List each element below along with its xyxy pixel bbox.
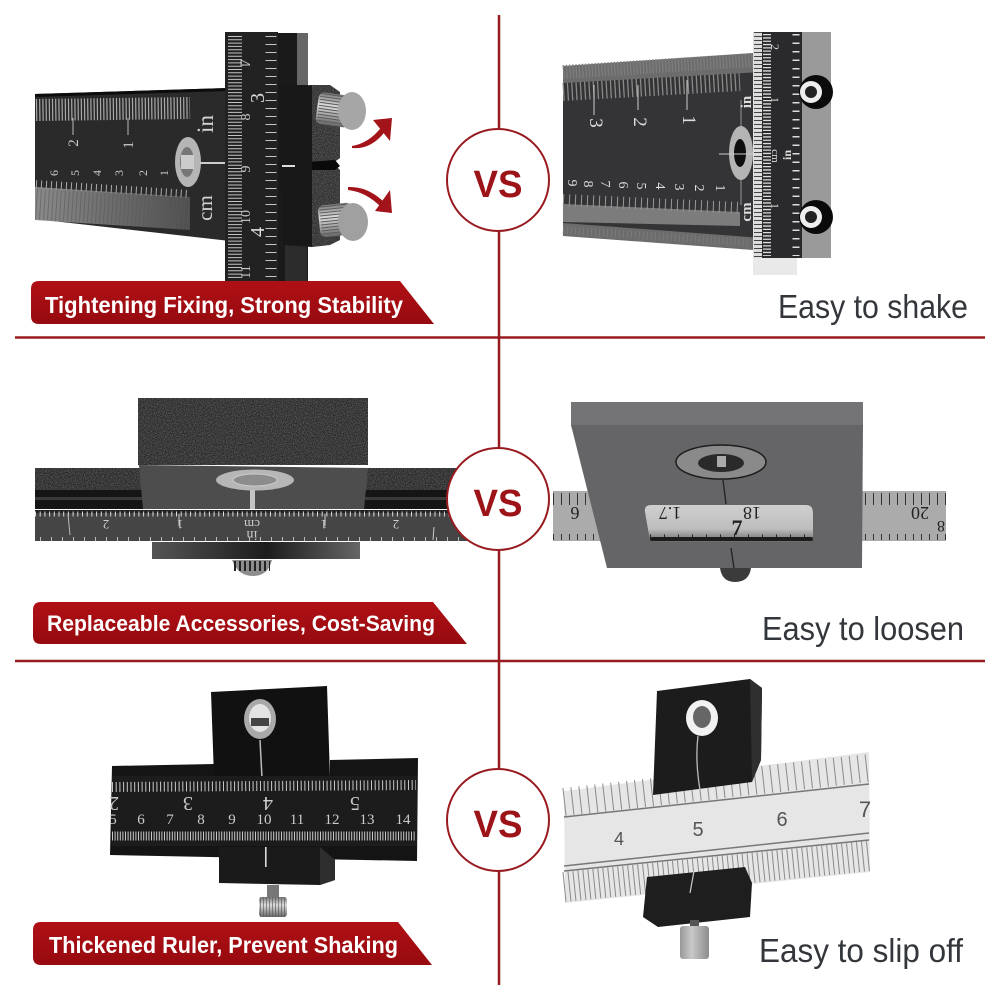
vertical ruler: 11: [239, 265, 254, 279]
mounting bracket: cm: [769, 149, 781, 163]
label: Tightening Fixing: Tightening Fixing, Strong Stability: [45, 292, 403, 318]
horizontal ruler: 4: [90, 170, 104, 176]
black ruler: 10: [256, 812, 272, 828]
steel ruler: 20: [911, 503, 929, 523]
horizontal ruler: 1: [121, 141, 137, 149]
gray ruler: in: [739, 95, 755, 108]
black ruler: 6: [137, 812, 145, 828]
ruler: cm: [244, 517, 260, 532]
gray ruler: [563, 53, 762, 250]
gray ruler: 2: [691, 184, 706, 192]
mounting bracket: in: [780, 150, 794, 160]
vertical ruler: 9: [239, 166, 254, 172]
steel ruler: 8: [937, 517, 945, 534]
clamp block: [279, 85, 340, 247]
lower block: [219, 847, 335, 885]
label: Replaceable Accessories: Replaceable Accessories, Cost-Saving: [47, 611, 435, 636]
countersunk hole: [676, 445, 766, 504]
scale window: [645, 503, 813, 568]
front plate: [139, 465, 368, 509]
horizontal ruler: in: [193, 115, 218, 133]
black ruler: 5: [109, 812, 117, 828]
black ruler: 7: [166, 812, 174, 828]
vs badge top: VS: [474, 164, 522, 206]
steel ruler: 4: [614, 829, 624, 849]
horizontal ruler: 5: [68, 170, 82, 176]
ruler: 2: [393, 517, 399, 532]
ruler: 1: [321, 517, 327, 532]
lower block: [152, 542, 360, 559]
panel: easy to slip off product photo: [564, 679, 871, 959]
gray ruler: 9: [564, 180, 579, 186]
horizontal ruler: 3: [112, 170, 126, 176]
vs badge middle: VS: [474, 483, 522, 525]
icon: bottom screw: [799, 200, 833, 234]
black ruler: 5: [350, 792, 360, 814]
mounting bracket: [753, 32, 831, 275]
gray ruler: 3: [671, 184, 686, 190]
gray ruler: 6: [615, 182, 630, 188]
ruler: 2: [103, 517, 109, 532]
pin screw: [680, 920, 709, 959]
icon: knurled screw: [232, 560, 272, 576]
horizontal ruler: 2: [66, 139, 82, 147]
black ruler: 3: [183, 792, 193, 814]
gray ruler: 1: [678, 115, 699, 125]
panel: easy to shake product photo: [563, 32, 833, 275]
black ruler: 4: [263, 792, 273, 814]
vertical ruler: [225, 32, 278, 282]
mounting plate: [571, 402, 863, 568]
label: Replaceable Accessories: [33, 602, 467, 644]
black ruler: 12: [324, 812, 340, 828]
horizontal ruler: 6: [47, 170, 61, 176]
vertical ruler: 7: [238, 59, 254, 67]
arrow: tighten down: [348, 187, 392, 213]
caption: Easy to shake: Easy to shake: [778, 288, 968, 325]
black ruler: [109, 758, 418, 861]
steel ruler: [564, 752, 871, 903]
label: Thickened Ruler: Thickened Ruler, Prevent Shaking: [49, 932, 398, 958]
black ruler: 8: [197, 812, 205, 828]
gray ruler: 5: [633, 182, 648, 190]
panel: easy to loosen product photo: [553, 402, 946, 582]
gray ruler: 2: [629, 117, 650, 127]
ruler: 1: [177, 517, 183, 532]
vs badge top: [447, 129, 549, 231]
upper block: [138, 398, 368, 465]
vertical rail: [277, 33, 308, 283]
vs badge middle: [447, 448, 549, 550]
arrow: tighten up: [352, 118, 392, 148]
panel: tightening fixing product photo: [35, 32, 392, 283]
knurled screws: [315, 92, 368, 241]
horizontal ruler: [35, 88, 230, 241]
vertical ruler: 4: [247, 227, 269, 237]
gray ruler: 7: [597, 180, 612, 188]
rail: [35, 468, 467, 509]
mounting bracket: 2: [768, 44, 782, 50]
gray ruler: 3: [585, 118, 606, 128]
upper block: [653, 679, 762, 795]
mounting bracket: 1: [768, 203, 782, 209]
upper block: [211, 686, 330, 778]
vertical ruler: 10: [239, 210, 254, 224]
panel: replaceable accessories product photo: [35, 398, 467, 576]
steel ruler: 5: [692, 819, 704, 841]
scale window: 1.7: [659, 503, 681, 523]
steel ruler: 6: [570, 503, 580, 523]
vertical ruler: 8: [239, 114, 254, 120]
horizontal ruler: 1: [157, 170, 171, 176]
caption: Easy to slip off: Easy to slip off: [759, 932, 964, 969]
gray ruler: 8: [580, 180, 595, 188]
black ruler: 13: [360, 812, 374, 828]
ruler: in: [247, 527, 257, 542]
icon: thumb screw: [259, 885, 287, 917]
black ruler: 14: [396, 812, 411, 828]
horizontal ruler: cm: [193, 195, 217, 221]
screw tip: [720, 568, 751, 582]
icon: top screw: [799, 75, 833, 109]
vs badge bottom: VS: [474, 804, 522, 846]
mounting bracket: 1: [768, 97, 782, 103]
label: Tightening Fixing: [31, 281, 434, 324]
scale window: 7: [732, 515, 742, 540]
black ruler: 11: [290, 812, 304, 828]
steel ruler: 7: [859, 797, 871, 822]
black ruler: 9: [228, 812, 236, 828]
gray ruler: cm: [739, 202, 755, 222]
label: Thickened Ruler: [33, 922, 432, 965]
scale window: 18: [743, 503, 761, 523]
caption: Easy to loosen: Easy to loosen: [762, 610, 964, 647]
panel: thickened ruler product photo: [109, 686, 418, 917]
gray ruler: 1: [712, 184, 727, 192]
horizontal ruler: 2: [136, 170, 150, 176]
lower block: [643, 867, 752, 927]
vertical ruler: 3: [247, 93, 269, 103]
black ruler: 2: [109, 792, 119, 814]
gray ruler: 4: [652, 182, 667, 190]
ruler: [35, 510, 467, 542]
steel ruler: 6: [776, 809, 788, 831]
steel ruler: [553, 491, 946, 541]
vs badge bottom: [447, 769, 549, 871]
